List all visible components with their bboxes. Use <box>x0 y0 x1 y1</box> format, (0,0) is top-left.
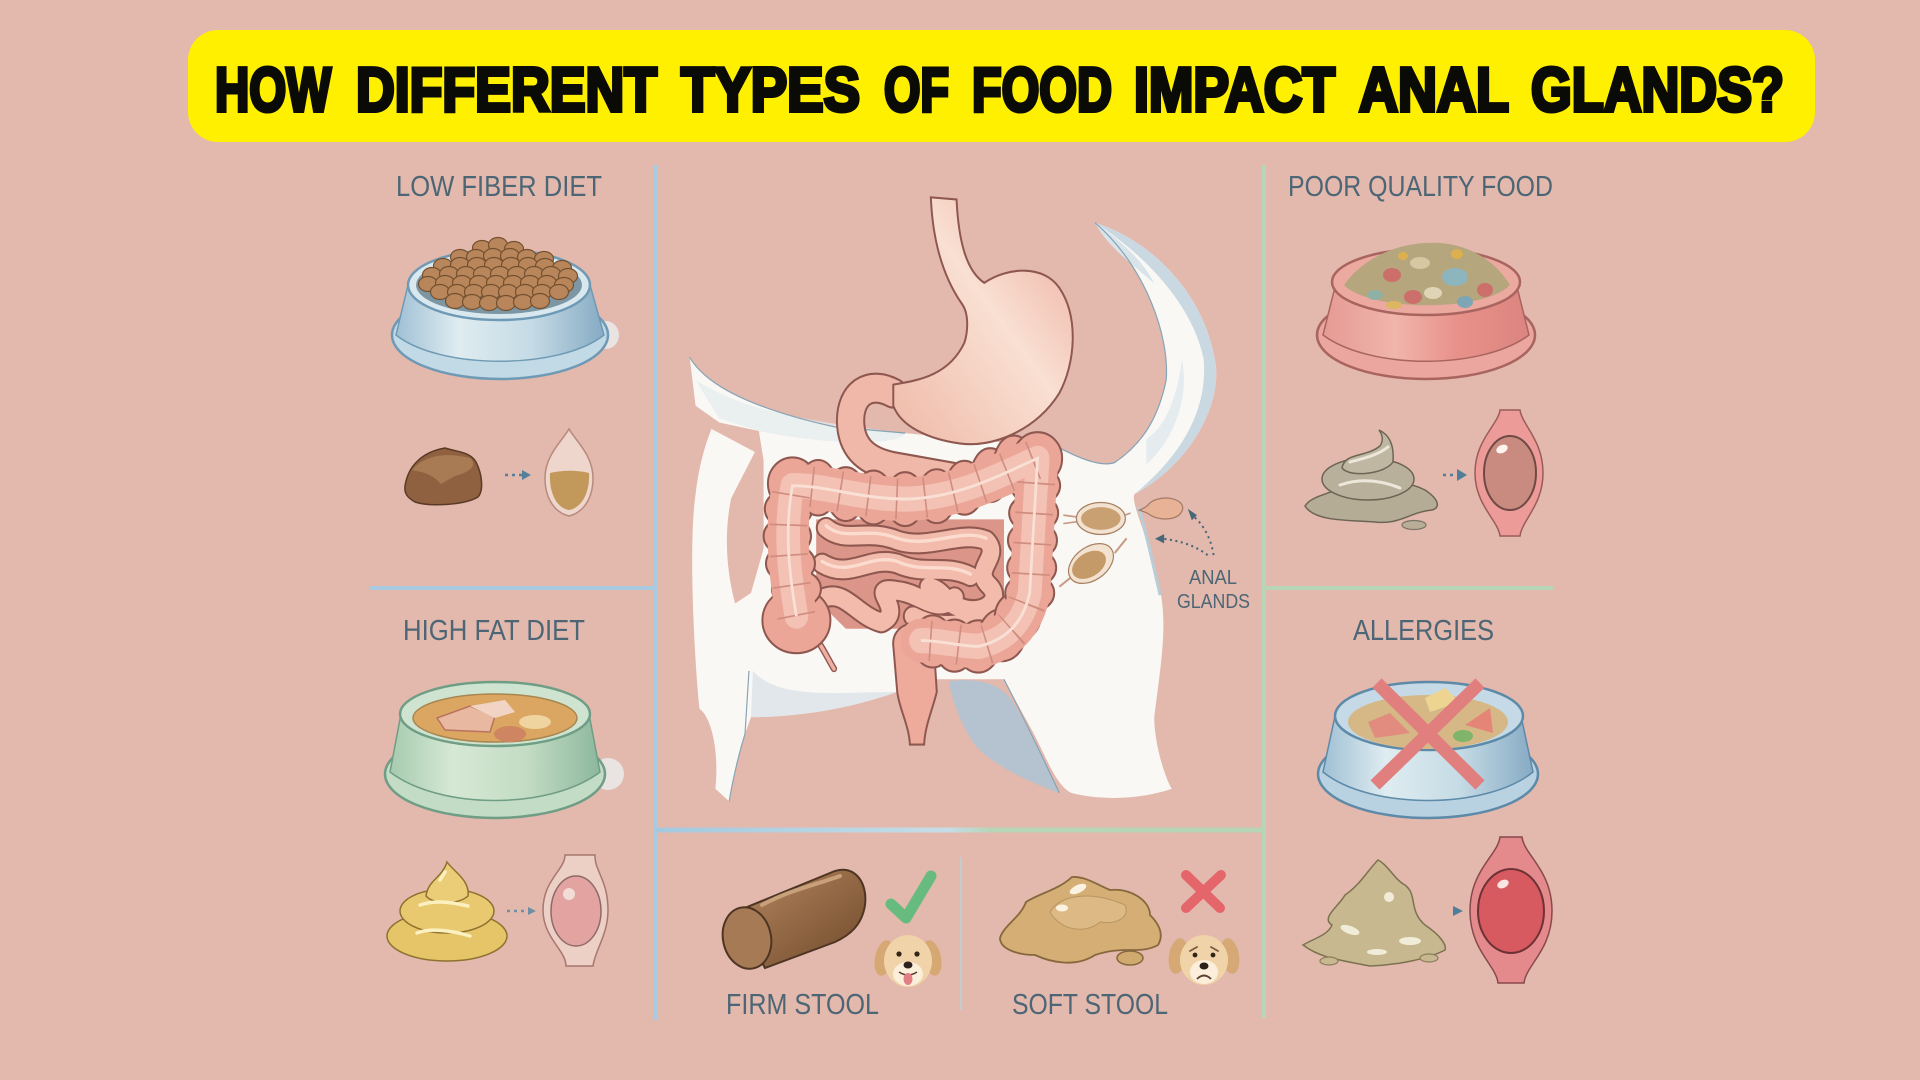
label: anal glands: ANAL <box>1189 567 1237 589</box>
icon: soft stool puddle <box>1000 877 1161 965</box>
heading: firm stool: FIRM STOOL <box>726 989 879 1021</box>
stomach and duodenum <box>851 197 1073 477</box>
heading: soft stool: SOFT STOOL <box>1012 989 1168 1021</box>
large intestine <box>762 432 1062 673</box>
panel: allergies <box>1303 615 1552 983</box>
icon: firm stool log <box>717 870 865 973</box>
anal glands <box>1059 498 1183 592</box>
title banner: ANAL <box>1359 56 1509 125</box>
rectum <box>893 623 937 745</box>
heading: low fiber diet: LOW FIBER DIET <box>396 171 602 203</box>
panel: dog digestive anatomy <box>690 197 1216 801</box>
icon: green bowl with fatty food <box>385 682 624 818</box>
panel: soft stool <box>1000 875 1242 1021</box>
panel: firm stool <box>717 870 945 1021</box>
title banner: IMPACT <box>1134 56 1335 125</box>
icon: red bowl with mixed food <box>1317 243 1535 379</box>
icon: blue bowl with kibble <box>392 238 619 379</box>
arrows to anal glands <box>1155 509 1214 555</box>
icon: happy dog <box>871 935 945 987</box>
panel: poor quality food <box>1288 171 1553 536</box>
icon: severely inflamed gland <box>1470 837 1552 983</box>
icon: swollen gland <box>543 855 608 966</box>
arrow <box>507 907 536 915</box>
title banner: TYPES <box>681 56 860 125</box>
icon: lumpy stool <box>1303 860 1445 966</box>
puddles <box>1320 954 1438 965</box>
dog body silhouette <box>690 223 1216 801</box>
label: anal glands <box>1177 567 1250 613</box>
icon: red cross <box>1186 875 1221 908</box>
icon: sad dog <box>1166 935 1242 985</box>
arrow <box>1443 469 1467 481</box>
title banner: GLANDS? <box>1531 56 1784 125</box>
icon: grey greasy stool <box>1305 430 1437 522</box>
icon: green check <box>891 876 931 918</box>
icon: inflamed gland <box>1475 410 1543 536</box>
panel: high fat diet <box>385 615 624 966</box>
heading: allergies: ALLERGIES <box>1353 615 1494 647</box>
small puddle <box>1402 520 1426 530</box>
red cross over bowl <box>1375 683 1480 785</box>
arrow <box>1453 906 1463 916</box>
label: anal glands: GLANDS <box>1177 591 1250 613</box>
title banner: OF <box>884 56 949 125</box>
panel: low fiber diet <box>392 171 619 516</box>
title banner: HOW <box>215 56 331 125</box>
icon: gland with low fill <box>545 429 593 516</box>
heading: high fat diet: HIGH FAT DIET <box>403 615 585 647</box>
heading: poor quality food: POOR QUALITY FOOD <box>1288 171 1553 203</box>
title banner: DIFFERENT <box>356 56 657 125</box>
title banner: FOOD <box>972 56 1112 125</box>
title banner <box>188 30 1815 142</box>
small intestine <box>816 519 1004 629</box>
icon: blue bowl with crossed out food <box>1318 682 1538 818</box>
arrow <box>505 470 531 480</box>
icon: greasy yellow stool <box>387 862 507 961</box>
icon: hard stool <box>405 448 482 505</box>
